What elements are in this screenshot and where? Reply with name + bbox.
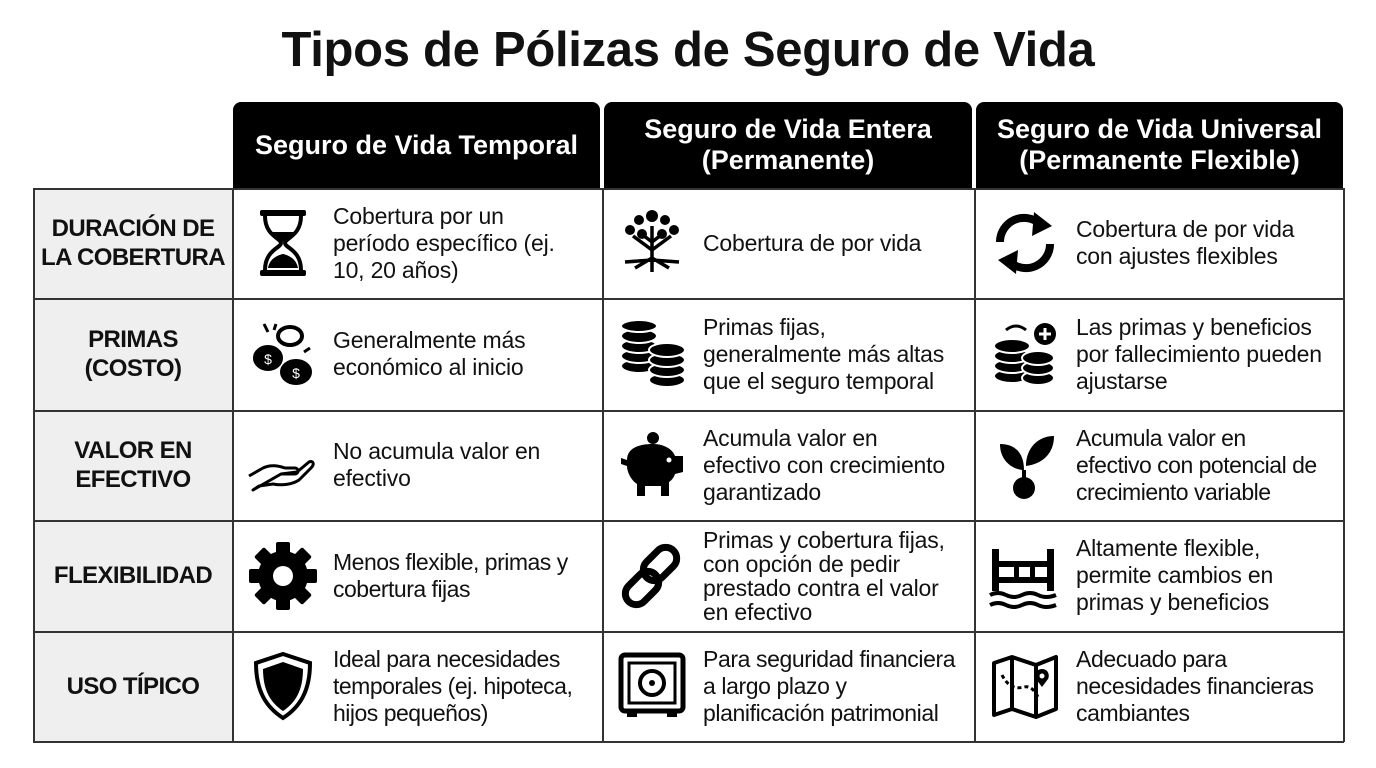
- text: Cobertura de por vida: [1076, 216, 1294, 242]
- row label: duración: LA COBERTURA: [41, 244, 225, 271]
- text: a largo plazo y: [703, 672, 847, 698]
- text: necesidades financieras: [1076, 672, 1314, 698]
- text: [703, 646, 956, 726]
- header: universal: [976, 102, 1343, 188]
- text: efectivo: [333, 465, 411, 491]
- text: Ideal para necesidades: [333, 646, 560, 672]
- text: garantizado: [703, 478, 821, 504]
- text: que el seguro temporal: [703, 368, 934, 394]
- text: [333, 438, 540, 491]
- text: permite cambios en: [1076, 562, 1273, 588]
- icon: coins plus: [995, 323, 1056, 384]
- text: [1076, 535, 1273, 615]
- text: Acumula valor en: [703, 424, 878, 450]
- text: en efectivo: [703, 598, 812, 624]
- text: por fallecimiento pueden: [1076, 340, 1322, 366]
- text: Altamente flexible,: [1076, 535, 1260, 561]
- text: Primas fijas,: [703, 314, 826, 340]
- row label: duración: [33, 188, 233, 298]
- title: Tipos de Pólizas de Seguro de Vida: [281, 23, 1095, 77]
- text: período específico (ej.: [333, 230, 555, 256]
- text: con opción de pedir: [703, 550, 900, 576]
- icon: coin stacks: [622, 321, 684, 386]
- text: No acumula valor en: [333, 438, 540, 464]
- icon: gear: [249, 542, 317, 610]
- text: con ajustes flexibles: [1076, 243, 1278, 269]
- text: [1076, 424, 1317, 504]
- text: hijos pequeños): [333, 700, 488, 726]
- icon: piggy bank: [621, 432, 683, 496]
- row label: flexibilidad: FLEXIBILIDAD: [54, 562, 212, 589]
- text: prestado contra el valor: [703, 574, 939, 600]
- icon: hourglass: [260, 210, 306, 276]
- text: [1076, 646, 1314, 726]
- text: [703, 314, 944, 394]
- text: primas y beneficios: [1076, 589, 1269, 615]
- text: Primas y cobertura fijas,: [703, 526, 945, 552]
- text: Adecuado para: [1076, 646, 1227, 672]
- icon: map: [992, 654, 1058, 719]
- row label: valor: EFECTIVO: [75, 466, 191, 493]
- text: generalmente más altas: [703, 340, 944, 366]
- header: entera: [604, 102, 972, 188]
- text: Las primas y beneficios: [1076, 314, 1312, 340]
- header: universal: (Permanente Flexible): [1019, 145, 1300, 175]
- icon: coins: $: [264, 351, 272, 367]
- text: [333, 548, 568, 602]
- text: Cobertura de por vida: [703, 230, 921, 256]
- icon: coins: $: [292, 365, 300, 381]
- row label: valor: VALOR EN: [74, 437, 192, 464]
- row label: duración: DURACIÓN DE: [52, 215, 214, 242]
- text: económico al inicio: [333, 354, 524, 380]
- text: [703, 424, 945, 505]
- icon: bridge/dock: [989, 549, 1057, 609]
- icon: open hand: [248, 460, 315, 492]
- text: Cobertura por un: [333, 202, 504, 228]
- icon: arrows cycle: [996, 212, 1054, 274]
- row label: uso: [33, 631, 233, 741]
- text: [333, 327, 525, 380]
- text: Para seguridad financiera: [703, 646, 955, 672]
- header: entera: (Permanente): [702, 145, 874, 175]
- text: [1076, 314, 1322, 394]
- icon: coins: [253, 323, 312, 385]
- row label: primas: PRIMAS: [88, 326, 178, 353]
- text: cambiantes: [1076, 700, 1190, 726]
- row label: uso: USO TÍPICO: [67, 672, 199, 700]
- text: Generalmente más: [333, 327, 525, 353]
- text: efectivo con crecimiento: [703, 452, 945, 478]
- header: temporal: Seguro de Vida Temporal: [255, 130, 578, 160]
- icon: safe: [618, 652, 686, 717]
- text: 10, 20 años): [333, 256, 458, 282]
- text: [1076, 216, 1294, 269]
- header: temporal: [233, 102, 600, 188]
- text: temporales (ej. hipoteca,: [333, 672, 572, 698]
- header: universal: Seguro de Vida Universal: [997, 114, 1322, 144]
- row label: flexibilidad: [33, 520, 233, 631]
- row label: primas: (COSTO): [85, 355, 181, 382]
- text: [703, 526, 945, 624]
- text: efectivo con potencial de: [1076, 452, 1317, 478]
- row label: primas: [33, 298, 233, 410]
- icon: tree: [624, 210, 680, 272]
- text: ajustarse: [1076, 368, 1168, 394]
- row label: valor: [33, 410, 233, 520]
- text: [333, 202, 555, 283]
- text: Menos flexible, primas y: [333, 548, 568, 574]
- text: crecimiento variable: [1076, 478, 1271, 504]
- icon: sprout: [1000, 436, 1054, 499]
- text: Acumula valor en: [1076, 424, 1246, 450]
- header: entera: Seguro de Vida Entera: [644, 114, 932, 144]
- text: planificación patrimonial: [703, 700, 938, 726]
- icon: shield: [254, 652, 312, 720]
- text: cobertura fijas: [333, 576, 470, 602]
- icon: chain: [622, 544, 680, 608]
- text: [333, 646, 572, 726]
